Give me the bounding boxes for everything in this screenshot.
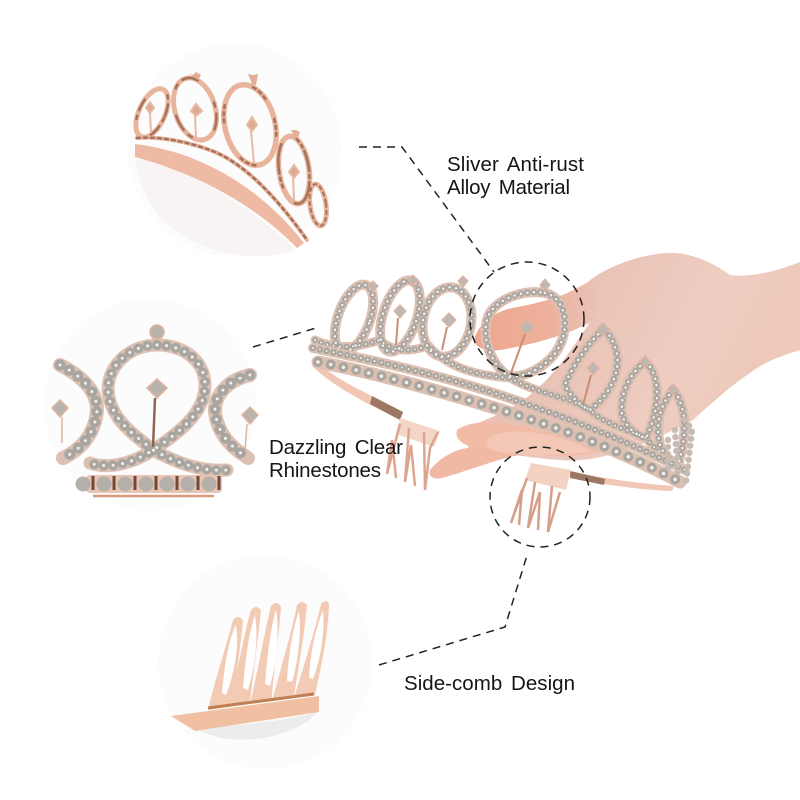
crown diamonds and stems	[52, 325, 258, 450]
label: alloy material	[447, 153, 584, 199]
crown inner prongs	[146, 102, 299, 200]
rose gold band	[135, 144, 304, 248]
hand	[430, 253, 800, 479]
comb teeth	[208, 601, 329, 710]
comb base bar	[171, 696, 319, 731]
panel: top detail circle	[128, 43, 342, 257]
label: rhinestones	[269, 436, 403, 482]
left comb	[387, 418, 440, 490]
callout ring: crown detail	[470, 262, 584, 376]
right comb	[511, 463, 571, 532]
label: rhinestones: Rhinestones	[269, 459, 381, 482]
lower fingers	[456, 422, 600, 456]
palm and wrist	[460, 253, 800, 461]
leader line: side comb	[379, 552, 528, 665]
crown rhinestone loops	[315, 276, 684, 465]
label: alloy material: Sliver Anti-rust	[447, 153, 584, 176]
crown rhinestone arcs	[60, 345, 250, 470]
label: rhinestones: Dazzling Clear	[269, 436, 403, 459]
label: alloy material: Alloy Material	[447, 176, 570, 199]
leader line: rhinestones	[253, 328, 316, 347]
callout ring: comb detail	[490, 447, 590, 547]
crown base row	[83, 475, 226, 496]
crown diamonds and stems	[368, 275, 678, 405]
main tiara	[312, 275, 692, 532]
panel: left rhinestone detail circle	[44, 299, 258, 511]
crown bands	[313, 348, 692, 482]
comb slots	[222, 610, 323, 695]
headband shadow	[135, 158, 296, 256]
index finger	[475, 278, 596, 350]
crown metal loops	[129, 72, 329, 240]
right headband	[570, 471, 674, 491]
leader line: alloy material	[359, 147, 494, 272]
label: side comb: Side-comb Design	[404, 672, 575, 695]
panel: bottom comb detail circle	[158, 555, 372, 769]
left headband	[312, 358, 403, 420]
